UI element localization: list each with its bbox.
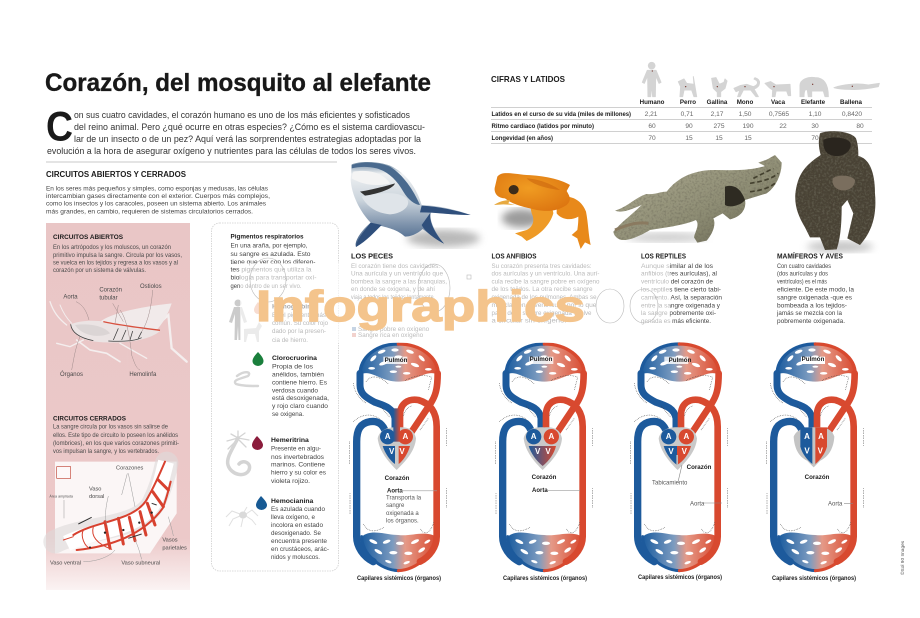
panel: pigmentos respiratorios xyxy=(212,223,338,571)
row: latidos: 1,50 xyxy=(739,111,752,118)
pigment: hemocianina: en crustáceos, arác- xyxy=(271,546,329,553)
pigment: hemeritrina: marinos. Contiene xyxy=(271,462,325,468)
diagram: reptile circulation: A xyxy=(666,432,672,441)
row: ritmo: 60 xyxy=(648,123,656,130)
diagram: fish circulation: A xyxy=(385,432,391,441)
column: los reptiles: LOS REPTILES xyxy=(641,252,686,260)
diagram: fish circulation: Capilares sistémicos (órganos) xyxy=(357,575,441,582)
diagram: amphibian circulation: V xyxy=(545,447,551,456)
column: mamíferos y aves: eficiente. De este modo, la xyxy=(777,286,854,294)
column: los reptiles: ventrículo del corazón de xyxy=(641,278,713,286)
intro text with drop cap xyxy=(46,102,425,157)
circuitos cerrados text xyxy=(53,416,179,455)
diagram: earthworm: dorsal xyxy=(89,494,104,500)
diagram: fish circulation: A xyxy=(402,432,408,441)
row: ritmo: 90 xyxy=(685,123,693,130)
diagram: reptile circulation: Tabicamiento xyxy=(652,480,688,486)
pigment: hemocianina: lleva oxígeno, e xyxy=(271,514,315,521)
row: latidos: 2,21 xyxy=(645,111,658,118)
diagram: reptile circulation xyxy=(630,344,728,581)
icon: marine worm xyxy=(227,431,250,475)
diagram: earthworm: Vasos xyxy=(162,537,178,543)
icon: worm xyxy=(235,372,258,386)
row: latidos: Latidos en el curso de su vida (miles de millones) xyxy=(492,111,631,118)
diagram: reptile circulation: V xyxy=(682,447,688,456)
diagram: grasshopper: tubular xyxy=(99,295,118,301)
watermark xyxy=(240,258,670,343)
diagram: mammal and bird circulation: A xyxy=(804,432,810,441)
column: mamíferos y aves: sangre oxigenada -que es xyxy=(777,294,853,302)
pigment: clorocruorina: Propia de los xyxy=(272,364,314,370)
column: los anfibios: dos aurículas y un ventrículo. Una aurí- xyxy=(492,270,600,278)
column: mamíferos y aves: jamás se mezcla con la xyxy=(776,310,842,317)
column headers: Elefante xyxy=(801,99,826,106)
diagram: mammal and bird circulation: V xyxy=(818,446,824,455)
diagram: fish circulation: oxigenada a xyxy=(386,511,419,517)
pigment: clorocruorina: está desoxigenada, xyxy=(272,395,329,402)
row: ritmo: 80 xyxy=(856,123,864,130)
pigmentos intro: En una araña, por ejemplo, xyxy=(230,243,308,250)
column headers: Vaca xyxy=(771,99,786,106)
row: ritmo: 190 xyxy=(742,123,754,130)
circuitos cerrados text: CIRCUITOS CERRADOS xyxy=(53,416,127,422)
column: los peces: viaja a todos los tejidos lentamente. xyxy=(351,294,435,301)
row: latidos: 0,8420 xyxy=(842,111,862,118)
pigment: hemoglobina xyxy=(272,304,328,344)
row: latidos: 0,7565 xyxy=(769,111,789,118)
column: los peces: Una aurícula y un ventrículo que xyxy=(351,270,443,278)
pigment: clorocruorina: contiene hierro. Es xyxy=(272,380,328,386)
column headers: Mono xyxy=(737,99,753,106)
pigment: clorocruorina: se oxigena. xyxy=(272,411,304,418)
section: circuitos abiertos y cerrados xyxy=(46,170,270,216)
circuitos abiertos text: se vuelca en los tejidos y regresa a los vasos y al xyxy=(53,260,178,266)
icon: drop green xyxy=(252,352,264,366)
icon: spider xyxy=(226,507,258,527)
diagram: amphibian circulation: A xyxy=(531,432,537,441)
column: mamíferos y aves: ventrículos) es el más xyxy=(777,278,828,286)
credit: ©Sol 90 Images xyxy=(899,540,906,575)
column: mamíferos y aves xyxy=(776,252,854,325)
title: Corazón, del mosquito al elefante xyxy=(45,69,431,97)
diagram: amphibian circulation xyxy=(495,344,593,582)
circuitos cerrados text: La sangre circula por los vasos sin salirse de xyxy=(53,424,168,430)
column: los reptiles: camiento. Así, la separación xyxy=(641,294,722,302)
diagram: fish circulation: Transporta la xyxy=(386,496,422,502)
pigment: hemoglobina: Hemoglobina xyxy=(272,304,315,310)
diagram: mammal and bird circulation: V xyxy=(804,446,810,455)
circuitos abiertos text: CIRCUITOS ABIERTOS xyxy=(53,234,124,241)
intro text with drop cap: del reino animal. Pero ¿qué ocurre en otras especies? ¿Cómo es el sistema cardiovascu- xyxy=(74,122,425,133)
image: gorilla xyxy=(795,131,875,252)
column: los anfibios: LOS ANFIBIOS xyxy=(492,252,537,260)
diagram: earthworm: parietales xyxy=(162,545,187,551)
diagram: amphibian circulation: Aorta xyxy=(532,488,548,494)
column headers: Perro xyxy=(680,99,696,106)
diagram: mammal and bird circulation: Corazón xyxy=(805,474,830,481)
pigmentos intro xyxy=(230,234,316,290)
row: longevidad: 70 xyxy=(811,135,819,142)
icon: human and dog xyxy=(229,300,262,342)
diagram: mammal and bird circulation: Pulmón xyxy=(802,356,825,363)
pigment: hemeritrina: nos invertebrados xyxy=(271,454,325,461)
column: mamíferos y aves: (dos aurículas y dos xyxy=(777,270,829,278)
column headers xyxy=(640,99,863,106)
column: los peces: LOS PECES xyxy=(351,252,393,260)
pigment: hemocianina: encuentra presente xyxy=(271,538,327,545)
legend: Sangre pobre en oxígeno xyxy=(358,326,430,333)
column: los reptiles: anfibios (tres aurículas), al xyxy=(641,270,718,278)
row: longevidad xyxy=(492,135,819,142)
row: ritmo: 22 xyxy=(779,123,787,130)
section: circuitos abiertos y cerrados: CIRCUITOS ABIERTOS Y CERRADOS xyxy=(46,170,186,179)
diagram: earthworm: Vaso xyxy=(89,486,101,492)
column: los reptiles: los reptiles tiene cierto tabi- xyxy=(641,286,721,294)
diagram: grasshopper: Corazón xyxy=(99,287,122,293)
row: latidos: 2,17 xyxy=(711,111,724,118)
pigment: clorocruorina: anélidos, también xyxy=(272,372,324,378)
circuitos abiertos text: primitivo impulsa la sangre. Circula por los vasos, xyxy=(53,252,182,259)
pigment: clorocruorina: y rojo claro cuando xyxy=(272,403,328,410)
pigment: hemoglobina: dado por la presen- xyxy=(272,328,326,335)
pigment: hemocianina: desoxigenado. Se xyxy=(271,530,321,537)
legend: Sangre rica en oxígeno xyxy=(358,332,424,339)
pigment: hemoglobina: Es el pigmento más xyxy=(272,312,327,319)
legend xyxy=(352,326,430,339)
diagram: amphibian circulation: V xyxy=(535,447,541,456)
diagram: earthworm: Vaso subneural xyxy=(121,561,160,567)
section: circuitos abiertos y cerrados: más grandes, en cambio, requieren de sistemas circulatorios cerrados. xyxy=(46,208,253,216)
animal silhouettes xyxy=(642,62,879,97)
diagram: fish circulation: V xyxy=(389,447,395,456)
diagram: fish circulation xyxy=(349,344,447,582)
image: frog xyxy=(494,173,591,249)
intro text with drop cap: C xyxy=(46,102,73,150)
circuitos cerrados text: vos impulsan la sangre, y los vertebrados. xyxy=(53,448,159,455)
pigment: clorocruorina xyxy=(272,355,329,418)
diagram: fish circulation: Corazón xyxy=(385,475,410,482)
row: ritmo: Ritmo cardiaco (latidos por minuto) xyxy=(492,123,594,130)
pigment: hemeritrina: Presente en algu- xyxy=(271,446,321,452)
column: mamíferos y aves: pobremente oxigenada. xyxy=(777,318,845,325)
image: crocodile xyxy=(613,155,782,243)
diagram: reptile circulation: A xyxy=(683,432,689,441)
circuitos abiertos text: En los artrópodos y los moluscos, un corazón xyxy=(53,244,171,251)
diagram: grasshopper: Órganos xyxy=(60,371,83,378)
column: los anfibios: a circular sin oxígeno. xyxy=(492,318,567,324)
column headers: Gallina xyxy=(707,99,728,106)
section: circuitos abiertos y cerrados: En los seres más pequeños y simples, como esponjas y medusas, las células xyxy=(46,186,269,192)
diagram: earthworm: Área ampliada xyxy=(49,495,74,499)
row: latidos: 1,10 xyxy=(809,111,822,118)
column: los reptiles: entre la sangre oxigenada y xyxy=(641,302,721,310)
column: los peces xyxy=(351,252,447,339)
intro text with drop cap: on sus cuatro cavidades, el corazón humano es uno de los más eficientes y sofisticados xyxy=(74,110,410,121)
pigment: hemoglobina: común. Su color rojo xyxy=(272,320,328,327)
pigment: hemocianina: incolora en estado xyxy=(271,522,323,529)
pigmentos intro: tes pigmentos que utiliza la xyxy=(230,267,312,274)
column: mamíferos y aves: MAMÍFEROS Y AVES xyxy=(777,252,843,260)
column: los anfibios: parte de la sangre oxigenada vuelve xyxy=(492,310,592,317)
diagram: fish circulation: sangre xyxy=(386,503,405,509)
row: longevidad: Longevidad (en años) xyxy=(492,135,553,142)
table heading: CIFRAS Y LATIDOS xyxy=(491,75,566,84)
row: ritmo xyxy=(492,123,864,130)
diagram: reptile circulation: Capilares sistémicos (órganos) xyxy=(638,574,722,581)
diagram: fish circulation: Pulmón xyxy=(385,357,408,364)
pigment: hemeritrina: hierro y su color es xyxy=(271,470,327,476)
column: mamíferos y aves: bombeada a los tejidos- xyxy=(777,302,847,310)
diagram: amphibian circulation: Pulmón xyxy=(530,356,553,363)
pigmentos intro: tiene que ver con los diferen- xyxy=(230,259,316,266)
column: los peces: El corazón tiene dos cavidades. xyxy=(351,263,440,270)
table rules xyxy=(491,107,872,144)
row: longevidad: 15 xyxy=(715,135,723,142)
row: ritmo: 30 xyxy=(811,123,819,130)
pigmentos intro: biología para transportar oxí- xyxy=(230,275,316,282)
panel: circuitos (pink) xyxy=(46,223,190,590)
diagram: earthworm: Vaso ventral xyxy=(50,561,81,567)
diagram: grasshopper: Hemolinfa xyxy=(129,372,157,378)
pigment: hemocianina xyxy=(271,498,329,561)
column: los reptiles xyxy=(641,252,722,325)
diagram: fish circulation: Aorta xyxy=(387,488,403,494)
column: los anfibios: de los tejidos. La otra recibe sangre xyxy=(492,286,593,293)
diagram: earthworm: Corazones xyxy=(116,465,144,471)
row: ritmo: 275 xyxy=(713,123,725,130)
row: longevidad: 15 xyxy=(685,135,693,142)
pigmentos intro: su sangre es azulada. Esto xyxy=(230,251,311,258)
column: los reptiles: la sangre pobremente oxi- xyxy=(641,310,716,317)
pigment: clorocruorina: verdosa cuando xyxy=(272,388,318,394)
diagram: reptile circulation: Pulmón xyxy=(669,357,692,364)
column: los anfibios xyxy=(492,252,600,324)
intro text with drop cap: lar de un insecto o de un pez? Aquí verá las sorprendentes estrategias adoptadas por la xyxy=(74,134,422,145)
diagram: amphibian circulation: A xyxy=(548,432,554,441)
pigment: hemocianina: nidos y moluscos. xyxy=(271,554,320,561)
watermark: Infographics xyxy=(256,282,585,331)
pigment: hemocianina: Hemocianina xyxy=(271,498,314,505)
diagram: amphibian circulation: Corazón xyxy=(532,474,557,481)
circuitos cerrados text: ellos. Este tipo de circuito lo poseen los anélidos xyxy=(53,432,178,439)
column: los peces: en donde se oxigena, y de ahí xyxy=(351,286,435,293)
diagram: reptile circulation: Corazón xyxy=(687,464,712,471)
diagram: reptile circulation: V xyxy=(668,447,674,456)
column headers: Ballena xyxy=(840,99,863,106)
row: longevidad: 15 xyxy=(744,135,752,142)
diagram: mammal and bird circulation: A xyxy=(818,432,824,441)
column: los anfibios: cula recibe la sangre pobre en oxígeno xyxy=(492,278,600,286)
pigmentos intro: geno dentro de un ser vivo. xyxy=(230,283,302,290)
row: latidos xyxy=(492,111,862,118)
column: los peces: bombea la sangre a las branquias, xyxy=(351,278,447,286)
column: los anfibios: Su corazón presenta tres cavidades: xyxy=(492,263,592,270)
diagram: earthworm xyxy=(49,462,187,567)
pigmentos intro: Pigmentos respiratorios xyxy=(230,234,304,240)
table: cifras y latidos xyxy=(491,62,879,144)
icon: drop wine xyxy=(252,436,263,450)
pigment: hemeritrina xyxy=(271,437,327,485)
diagram: mammal and bird circulation xyxy=(766,344,864,582)
diagram: grasshopper: Ostiolos xyxy=(140,284,162,290)
diagram: reptile circulation: Aorta xyxy=(690,502,705,508)
diagram: fish circulation: los órganos. xyxy=(386,518,419,524)
column: los anfibios: oxigenada de los pulmones. Ambas se xyxy=(492,294,597,301)
image: shark xyxy=(351,162,480,247)
diagram: mammal and bird circulation: Capilares sistémicos (órganos) xyxy=(772,575,856,582)
row: latidos: 0,71 xyxy=(681,111,694,118)
pigment: hemeritrina: violeta rojizo. xyxy=(271,478,310,485)
diagram: mammal and bird circulation: Aorta xyxy=(828,502,843,508)
circuitos abiertos text: corazón por un sistema de válvulas. xyxy=(53,267,146,274)
column: mamíferos y aves: Con cuatro cavidades xyxy=(777,263,832,270)
row: longevidad: 70 xyxy=(648,135,656,142)
diagram: grasshopper xyxy=(50,284,187,378)
circuitos abiertos text xyxy=(53,234,182,274)
column headers: Humano xyxy=(640,99,665,106)
icon: drop red xyxy=(254,302,262,314)
pigment: hemocianina: Es azulada cuando xyxy=(271,506,325,513)
column: los reptiles: Aunque similar al de los xyxy=(641,263,714,270)
pigment: hemoglobina: cia de hierro. xyxy=(272,337,308,344)
intro text with drop cap: evolución a la hora de asegurar oxígeno y nutrientes para las células de todos los seres vivos. xyxy=(47,146,416,157)
diagram: fish circulation: V xyxy=(399,447,405,456)
icon: drop blue xyxy=(256,496,267,510)
pigment: clorocruorina: Clorocruorina xyxy=(272,355,317,362)
section: circuitos abiertos y cerrados: intercambian gases directamente con el exterior. Cuerpos más complejos, xyxy=(46,193,270,200)
column: los reptiles: genada es más eficiente. xyxy=(641,318,711,325)
diagram: amphibian circulation: Capilares sistémicos (órganos) xyxy=(503,575,587,582)
section: circuitos abiertos y cerrados: como los insectos y los caracoles, poseen un sistema abierto. Los animales xyxy=(46,201,267,208)
circuitos cerrados text: (lombrices), en los que varios corazones primiti- xyxy=(53,440,179,447)
column: los anfibios: mezclan en el ventrículo, por lo que xyxy=(492,302,597,309)
pigment: hemeritrina: Hemeritrina xyxy=(271,437,309,444)
diagram: grasshopper: Aorta xyxy=(63,295,78,301)
